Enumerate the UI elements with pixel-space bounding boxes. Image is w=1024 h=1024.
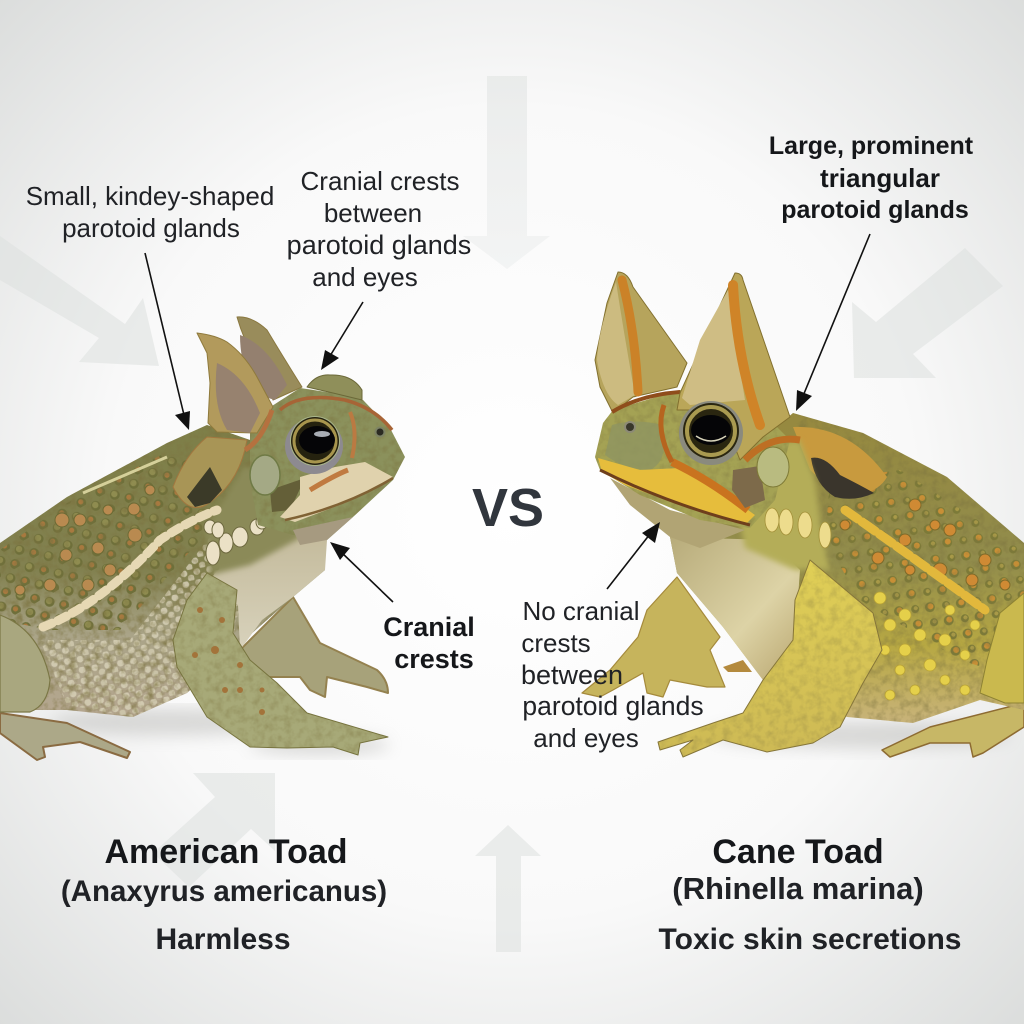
body: [670, 413, 1024, 723]
dorsal ridge dots: [43, 510, 217, 627]
label: cranial crests: [383, 612, 475, 674]
haunch: [980, 593, 1024, 703]
cranial bump: [307, 375, 362, 400]
rear ear fin: [237, 317, 302, 400]
cheek patch: [732, 466, 765, 508]
caption: American toad: American Toad: [104, 833, 348, 871]
orange warts: [15, 485, 155, 595]
body: [0, 425, 325, 717]
label: cranial crests: Cranial: [383, 612, 475, 642]
neck: [735, 440, 830, 570]
parotoid dark mark: [811, 458, 874, 499]
tympanum: [250, 455, 280, 495]
head: [595, 390, 790, 528]
neck patch: [205, 465, 300, 575]
label: cranial crests between glands: between: [324, 198, 422, 228]
label: no cranial crests: [521, 596, 704, 753]
dorsal light line: [83, 457, 167, 493]
nostril: [625, 422, 635, 432]
brow ridge: [280, 398, 392, 430]
eye: [285, 416, 343, 474]
parotoid gland: [793, 427, 887, 495]
American toad illustration: [0, 317, 405, 760]
caption: cane toad: Cane Toad: [712, 833, 884, 871]
label: no cranial crests: between: [521, 660, 623, 690]
orange collar: [745, 439, 800, 460]
label: no cranial crests: crests: [521, 628, 591, 658]
chin: [293, 517, 353, 545]
label: cranial crests between glands: [287, 166, 471, 292]
chin: [610, 478, 745, 548]
near front leg: [658, 560, 882, 757]
label: cranial crests: crests: [394, 644, 474, 674]
label: no cranial crests: and eyes: [533, 723, 639, 753]
label: large triangular glands: parotoid glands: [781, 196, 969, 224]
dorsal ridge: [845, 510, 985, 610]
label: cranial crests between glands: and eyes: [312, 262, 418, 292]
pointer arrows: [145, 234, 870, 602]
head: [250, 388, 405, 540]
label: no cranial crests: No cranial: [522, 596, 640, 626]
far front leg: [582, 577, 725, 697]
back foot: [882, 703, 1024, 757]
parotoid gland: [173, 437, 247, 508]
cheek patch: [270, 478, 305, 512]
label: cranial crests between glands: parotoid glands: [287, 230, 471, 260]
VS label: VS: [472, 478, 544, 538]
back foot: [0, 713, 130, 760]
body texture: [0, 425, 293, 717]
caption: cane toad: Toxic skin secretions: [659, 923, 961, 956]
caption: American toad: Harmless: [155, 923, 291, 956]
body texture: [780, 413, 1024, 723]
caption: American toad: (Anaxyrus americanus): [61, 875, 387, 908]
eye: [679, 401, 743, 465]
label: large triangular glands: Large, prominent: [769, 132, 974, 160]
far front leg: [240, 597, 388, 697]
rear toe: [723, 660, 752, 672]
label: no cranial crests: parotoid glands: [522, 691, 704, 721]
leg spots: [192, 607, 265, 715]
yellow warts: [874, 592, 980, 700]
tympanum: [757, 447, 789, 487]
caption: cane toad: [659, 833, 961, 956]
muzzle patch: [605, 422, 664, 470]
brow ridge: [612, 392, 680, 412]
neck nodules: [204, 515, 268, 565]
nostril: [376, 428, 384, 436]
scaly lower flank: [40, 530, 250, 717]
haunch: [0, 615, 50, 712]
label: large triangular glands: [769, 132, 974, 224]
throat: [205, 535, 327, 650]
caption: American toad: [61, 833, 387, 956]
label: cranial crests between glands: Cranial crests: [301, 166, 459, 196]
orange collar: [245, 410, 272, 450]
shadows under toads: [50, 708, 1010, 755]
label: small parotoid glands: Small, kindey-shaped: [26, 181, 274, 211]
lip yellow band: [598, 458, 755, 525]
label: small parotoid glands: [26, 181, 274, 243]
neck nodules: [765, 508, 831, 548]
throat and belly: [670, 537, 800, 680]
label: large triangular glands: triangular: [820, 163, 940, 193]
near front leg: [173, 573, 388, 755]
cane toad illustration: [582, 272, 1024, 757]
orange warts: [840, 499, 1010, 590]
front ear fin: [197, 333, 273, 433]
lip: [280, 462, 393, 522]
far ear fin: [595, 272, 687, 413]
label: small parotoid glands: parotoid glands: [62, 213, 240, 243]
parotoid dark spot: [187, 467, 222, 507]
front ear fin: [677, 273, 790, 460]
caption: cane toad: (Rhinella marina): [672, 871, 924, 906]
wart field: [825, 470, 1024, 680]
wart field: [0, 452, 215, 630]
